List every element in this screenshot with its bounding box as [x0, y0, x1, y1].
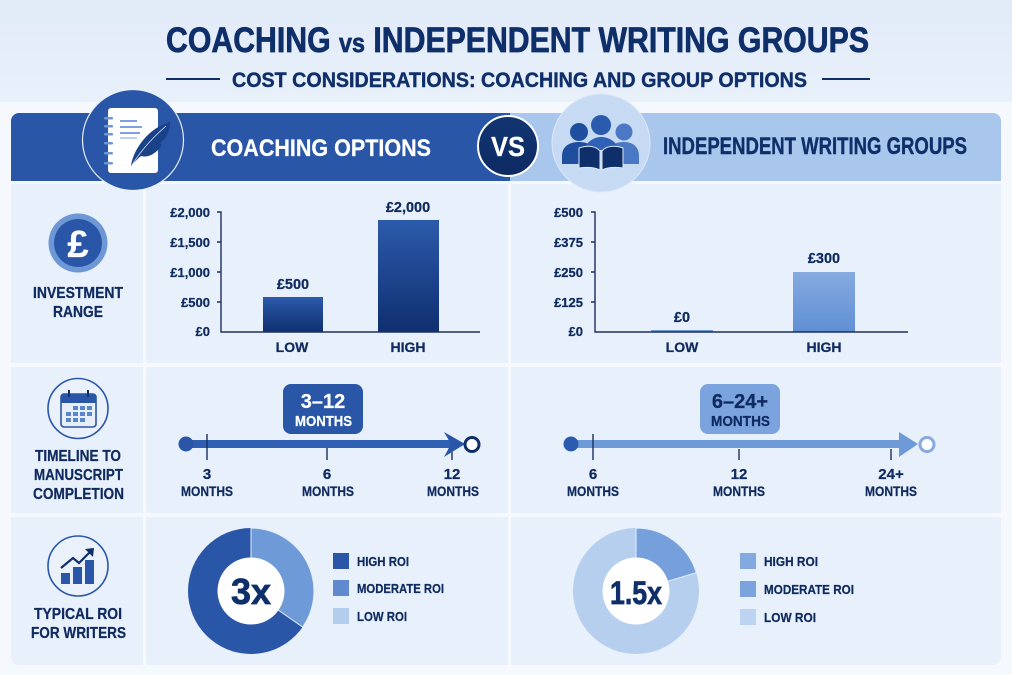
- callout: 3-12 months: 3–12: [301, 391, 345, 413]
- timeline: coaching: MONTHS: [427, 483, 479, 499]
- timeline: groups: MONTHS: [567, 483, 619, 499]
- timeline: coaching: 12: [444, 466, 460, 483]
- row label: timeline: MANUSCRIPT: [34, 467, 123, 484]
- legend: coaching ROI: MODERATE ROI: [357, 581, 444, 596]
- bar chart: coaching investment: £500: [181, 295, 210, 310]
- legend: groups ROI: [740, 553, 854, 625]
- donut chart: coaching ROI: 3x: [231, 571, 271, 612]
- row label: timeline: TIMELINE TO: [35, 448, 121, 465]
- bar chart: groups investment: [554, 205, 908, 355]
- subtitle: COST CONSIDERATIONS: COACHING AND GROUP OPTIONS: [232, 69, 807, 92]
- panel: row backgrounds: [11, 184, 1001, 665]
- heading: coaching options: COACHING OPTIONS: [211, 135, 431, 162]
- timeline: groups: 6: [589, 466, 597, 483]
- timeline: coaching: MONTHS: [302, 483, 354, 499]
- row label: investment range: INVESTMENT: [33, 285, 123, 302]
- timeline: groups: [564, 384, 934, 499]
- bar: low: [263, 277, 323, 355]
- bar: low: LOW: [276, 339, 309, 355]
- bar: low: [651, 310, 713, 355]
- icon: growth chart: [48, 536, 108, 596]
- callout: 3-12 months: MONTHS: [295, 413, 352, 430]
- bar chart: coaching investment: £2,000: [170, 205, 210, 220]
- bar: high: [793, 251, 855, 355]
- icon: reading group: [552, 94, 650, 192]
- icon: notebook and quill: [82, 90, 184, 190]
- timeline: coaching: [178, 384, 479, 499]
- bar chart: coaching investment: [170, 200, 480, 355]
- legend: groups ROI: MODERATE ROI: [764, 582, 854, 597]
- bar: high: HIGH: [806, 339, 842, 355]
- row label: ROI: [31, 536, 126, 642]
- row label: ROI: TYPICAL ROI: [34, 606, 122, 623]
- timeline: coaching: MONTHS: [181, 483, 233, 499]
- donut chart: groups ROI: [573, 528, 699, 654]
- legend: coaching ROI: [333, 553, 444, 624]
- bar: high: £2,000: [386, 200, 430, 216]
- icon: calendar: [48, 378, 108, 438]
- title: COACHING vs INDEPENDENT WRITING GROUPS: [166, 21, 869, 60]
- timeline: groups: 24+: [878, 466, 904, 483]
- bar chart: groups investment: £125: [554, 295, 583, 310]
- panel: groups header band: [510, 113, 1001, 181]
- bar: low: £500: [277, 277, 309, 293]
- bar: high: £300: [808, 251, 840, 267]
- callout: 6-24+ months: [700, 384, 780, 434]
- bar: low: £0: [674, 310, 690, 326]
- bar chart: coaching investment: £1,500: [170, 235, 210, 250]
- donut chart: groups ROI: 1.5x: [610, 575, 662, 611]
- panel: coaching header band: [11, 113, 510, 181]
- legend: groups ROI: HIGH ROI: [764, 554, 818, 569]
- row label: investment range: [33, 214, 123, 321]
- bar: high: [378, 200, 439, 355]
- bar chart: coaching investment: £1,000: [170, 265, 210, 280]
- arrow: [564, 432, 934, 457]
- bar chart: groups investment: £375: [554, 235, 583, 250]
- bar chart: groups investment: £0: [569, 324, 583, 339]
- row label: ROI: FOR WRITERS: [31, 625, 126, 642]
- icon: VS badge: VS: [491, 131, 525, 162]
- icon: pound: £: [67, 224, 89, 266]
- legend: coaching ROI: HIGH ROI: [357, 554, 409, 569]
- callout: 6-24+ months: 6–24+: [712, 391, 768, 413]
- legend: coaching ROI: LOW ROI: [357, 609, 407, 624]
- row label: timeline: COMPLETION: [33, 486, 124, 503]
- bar: low: LOW: [666, 339, 699, 355]
- row label: investment range: RANGE: [53, 304, 103, 321]
- timeline: groups: 12: [731, 466, 747, 483]
- legend: groups ROI: LOW ROI: [764, 610, 816, 625]
- row label: timeline: [33, 378, 124, 503]
- timeline: groups: MONTHS: [865, 483, 917, 499]
- callout: 3-12 months: [283, 384, 363, 434]
- bar chart: groups investment: £250: [554, 265, 583, 280]
- callout: 6-24+ months: MONTHS: [711, 413, 770, 430]
- donut chart: coaching ROI: [188, 528, 314, 654]
- timeline: groups: MONTHS: [713, 483, 765, 499]
- timeline: coaching: 6: [323, 466, 331, 483]
- arrow: [178, 432, 479, 457]
- bar chart: groups investment: £500: [554, 205, 583, 220]
- header banner: [0, 0, 1012, 102]
- bar chart: coaching investment: £0: [196, 324, 210, 339]
- timeline: coaching: 3: [203, 466, 211, 483]
- icon: VS badge: [478, 116, 538, 176]
- bar: high: HIGH: [390, 339, 426, 355]
